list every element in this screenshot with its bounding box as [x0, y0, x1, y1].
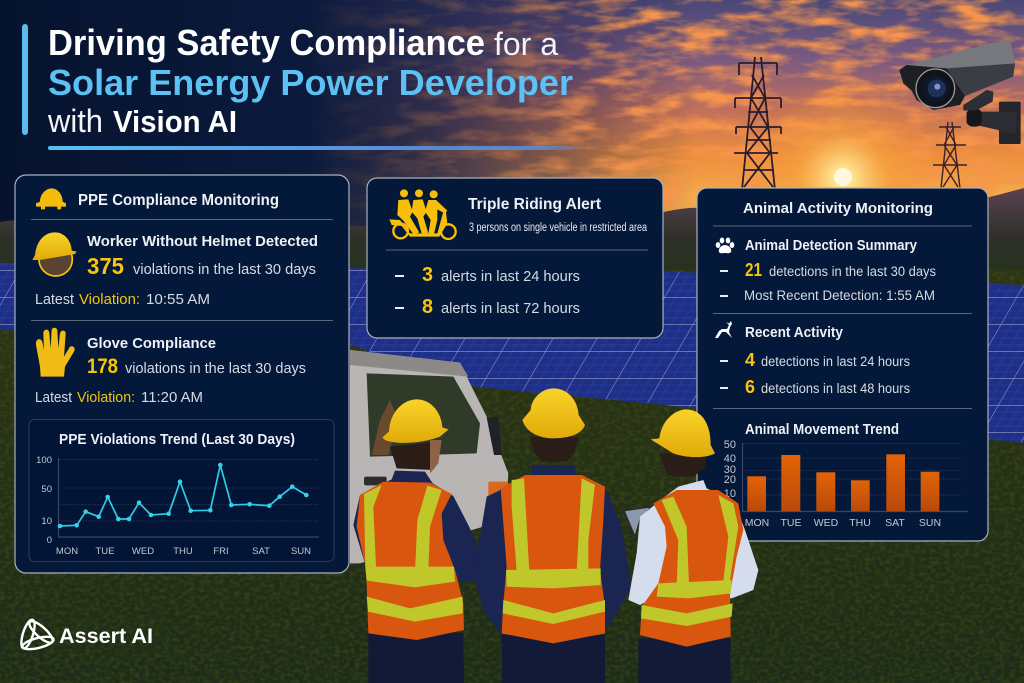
truck mirror — [487, 417, 502, 455]
text: recent activity heading: Recent Activity — [745, 325, 843, 341]
alert row 24 hours — [395, 264, 580, 286]
x axis labels: WED — [814, 517, 839, 529]
x axis labels: MON — [745, 517, 769, 529]
icon: glove — [36, 328, 75, 377]
x axis labels: WED — [132, 546, 154, 557]
row: 21 detections — [720, 260, 936, 280]
x axis labels: THU — [849, 517, 871, 529]
row: 6 detections: detections in last 48 hours — [761, 381, 910, 396]
panel: animal activity monitoring — [697, 188, 988, 541]
y axis labels: 10 — [724, 488, 736, 500]
text: triple riding subtitle: 3 persons on single vehicle in restricted area — [469, 222, 647, 234]
chart title: Animal Movement Trend — [745, 422, 899, 438]
logo icon — [19, 618, 55, 652]
text: latest glove violation: Violation: — [77, 390, 135, 406]
y axis labels: 50 — [724, 439, 736, 451]
y axis labels — [36, 455, 52, 546]
text: helmet violations: violations in the last 30 days — [133, 262, 316, 278]
text: latest helmet violation: 10:55 AM — [146, 292, 210, 308]
chart title: PPE Violations Trend (Last 30 Days) — [59, 432, 295, 448]
worker left — [353, 399, 479, 683]
chart: animal movement trend — [724, 422, 968, 529]
text: latest helmet violation — [35, 292, 210, 308]
row: 21 detections: 21 — [745, 260, 762, 280]
camera bracket plate — [999, 102, 1021, 144]
trend line — [60, 465, 306, 526]
text: glove violations: violations in the last 30 days — [125, 361, 306, 377]
background: sun — [834, 168, 852, 186]
background: hills — [0, 188, 1024, 300]
x axis labels: MON — [56, 546, 78, 557]
alert row 24 hours: 3 — [422, 264, 433, 286]
y axis labels: 0 — [47, 535, 52, 546]
x axis labels: TUE — [780, 517, 802, 529]
y axis labels: 100 — [36, 455, 52, 466]
title line 2: Solar Energy Power Developer — [48, 62, 573, 103]
icon: three riders on motorbike — [389, 189, 456, 239]
logo — [19, 618, 153, 652]
camera arm — [967, 112, 1017, 134]
alert row 72 hours: alerts in last 72 hours — [441, 300, 580, 317]
background: solar panels — [0, 263, 1024, 443]
y axis labels: 40 — [724, 453, 736, 465]
text: latest glove violation: 11:20 AM — [141, 390, 203, 406]
alert row 72 hours: 8 — [422, 296, 433, 318]
heading: triple riding: Triple Riding Alert — [468, 196, 602, 213]
panel: PPE compliance monitoring — [15, 175, 349, 573]
alert row 24 hours: alerts in last 24 hours — [441, 268, 580, 285]
title block — [22, 22, 588, 150]
y axis labels: 50 — [41, 484, 52, 495]
x axis labels: SUN — [919, 517, 941, 529]
row: most recent detection: Most Recent Detection: 1:55 AM — [744, 288, 935, 303]
title vision ai: Vision AI — [113, 104, 237, 139]
icon: paw — [716, 238, 734, 253]
x axis labels — [745, 517, 941, 529]
background: sunset sky — [214, 0, 1024, 226]
text: latest helmet violation: Latest — [35, 292, 74, 308]
icon: deer — [715, 321, 732, 338]
icon: hard hat small — [36, 188, 66, 209]
y axis labels — [724, 439, 736, 500]
number: 375: 375 — [87, 253, 124, 279]
number: 178: 178 — [87, 355, 118, 378]
text: latest glove violation: Latest — [35, 390, 72, 406]
camera — [899, 38, 1021, 144]
row: 6 detections — [720, 377, 910, 397]
text: helmet heading: Worker Without Helmet Detected — [87, 233, 318, 250]
tablet — [624, 507, 652, 537]
row: 21 detections: detections in the last 30 days — [769, 264, 936, 279]
truck — [350, 350, 508, 563]
bars — [747, 454, 939, 511]
heading: PPE: PPE Compliance Monitoring — [78, 192, 279, 209]
row: 4 detections: 4 — [745, 350, 755, 370]
worker right — [624, 409, 758, 683]
text: detection summary heading: Animal Detection Summary — [745, 238, 917, 254]
text: glove heading: Glove Compliance — [87, 335, 216, 352]
title accent bar — [22, 24, 28, 135]
y axis labels: 10 — [41, 516, 52, 527]
text: latest helmet violation: Violation: — [79, 292, 140, 308]
row: 6 detections: 6 — [745, 377, 755, 397]
text: latest glove violation — [35, 390, 203, 406]
worker center — [475, 388, 632, 683]
row: 4 detections — [720, 350, 910, 370]
row: 4 detections: detections in last 24 hours — [761, 354, 910, 369]
title for a: for a — [494, 26, 558, 62]
background: power tower left — [734, 57, 781, 190]
panel: triple riding alert — [367, 178, 663, 338]
icon: helmet worker — [32, 232, 77, 276]
title line 1: Driving Safety Compliance — [48, 22, 485, 63]
truck door handle — [364, 477, 387, 485]
x axis labels — [56, 546, 311, 557]
background: grass — [0, 270, 1024, 683]
x axis labels: SUN — [291, 546, 311, 557]
y axis labels: 20 — [724, 474, 736, 486]
logo text: Assert AI — [59, 625, 153, 648]
x axis labels: SAT — [885, 517, 905, 529]
camera lens — [916, 69, 955, 108]
title underline — [48, 146, 588, 150]
x axis labels: TUE — [96, 546, 114, 557]
truck tail light — [488, 482, 508, 500]
trend points — [58, 463, 309, 528]
alert row 72 hours — [395, 296, 580, 318]
x axis labels: SAT — [252, 546, 270, 557]
chart: PPE violations trend — [29, 420, 334, 562]
y axis labels: 30 — [724, 464, 736, 476]
x axis labels: THU — [173, 546, 193, 557]
background: power tower right — [933, 122, 967, 188]
title with: with — [47, 103, 103, 139]
camera housing — [907, 38, 1015, 68]
heading: animal: Animal Activity Monitoring — [743, 200, 933, 217]
truck window — [367, 373, 480, 457]
x axis labels: FRI — [213, 546, 229, 557]
